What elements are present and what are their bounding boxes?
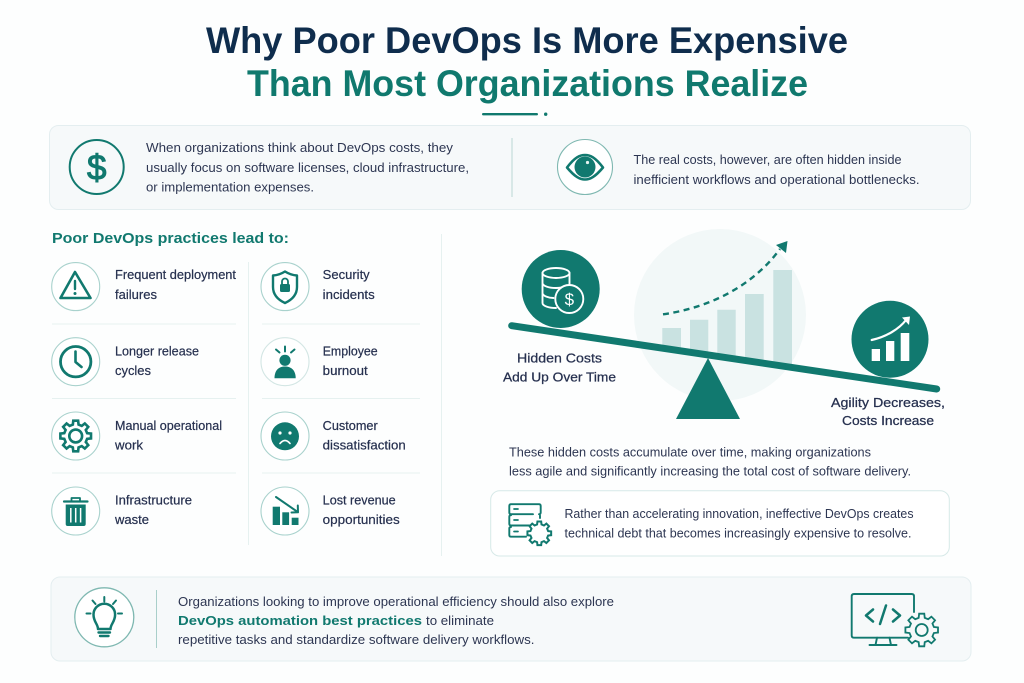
icon: clock (52, 338, 100, 386)
heading: poor practices: Poor DevOps practices lead to: (52, 230, 289, 247)
item: security incidents: Security (323, 268, 370, 282)
item: infrastructure waste: Infrastructure (115, 493, 192, 507)
item: employee burnout: Employee (323, 344, 378, 358)
intro text left (146, 141, 469, 194)
bar chart (662, 270, 792, 368)
icon: monitor with code and gear (852, 594, 938, 646)
text block: accumulation: These hidden costs accumulate over time, making organizations (509, 446, 871, 460)
icon: declining bars (261, 487, 309, 535)
chart backdrop circle (634, 229, 806, 401)
item: manual operational work: work (114, 439, 144, 453)
recommendation text: repetitive tasks and standardize software delivery workflows. (178, 633, 534, 647)
label: hidden costs: Add Up Over Time (503, 370, 616, 385)
icon: sad face (261, 412, 309, 460)
icon: shield (261, 263, 309, 311)
icon: light bulb (75, 588, 134, 647)
item: employee burnout: burnout (323, 364, 368, 378)
fulcrum (676, 358, 740, 419)
item: manual operational work (52, 412, 222, 460)
chart: balance scale with rising costs (503, 229, 945, 428)
item: customer dissatisfaction (261, 412, 406, 460)
label: agility decreases (831, 395, 945, 428)
item: lost revenue opportunities: Lost revenue (323, 493, 396, 507)
intro text right (634, 153, 920, 187)
recommendation text: Organizations looking to improve operational efficiency should also explore (178, 595, 614, 609)
intro text left: When organizations think about DevOps costs, they (146, 141, 454, 155)
icon: trash (52, 487, 100, 535)
title (206, 20, 848, 104)
label: hidden costs: Hidden Costs (517, 351, 603, 366)
text block: accumulation: less agile and significantly increasing the total cost of software delivery. (509, 465, 911, 479)
text block: accumulation (509, 446, 911, 479)
item: frequent deployment failures (52, 263, 237, 311)
panel: automation recommendation (51, 577, 971, 661)
item: frequent deployment failures: failures (115, 288, 157, 302)
label: hidden costs (503, 351, 616, 385)
icon: dollar (70, 140, 124, 194)
icon: coins circle (522, 250, 600, 328)
item: longer release cycles (52, 338, 199, 386)
item: lost revenue opportunities: opportunities (323, 513, 400, 527)
title underline (482, 112, 547, 116)
item: customer dissatisfaction: Customer (323, 419, 378, 433)
icon: coins circle: $ (565, 290, 575, 309)
item: infrastructure waste (52, 487, 192, 535)
arrow: rising trend (663, 241, 788, 314)
recommendation text: to eliminate (426, 614, 494, 628)
callout: technical debt: Rather than accelerating innovation, ineffective DevOps creates (564, 507, 914, 521)
icon: eye (558, 140, 612, 194)
item: longer release cycles: cycles (115, 364, 151, 378)
intro text left: usually focus on software licenses, cloud infrastructure, (146, 161, 469, 175)
callout: technical debt: technical debt that becomes increasingly expensive to resolve. (564, 527, 912, 541)
panel: intro (50, 126, 970, 210)
item: manual operational work: Manual operational (115, 419, 222, 433)
icon: warning (52, 263, 100, 311)
item: lost revenue opportunities (261, 487, 400, 535)
item: security incidents (261, 263, 375, 311)
icon: server with gear (509, 504, 551, 545)
intro text right: inefficient workflows and operational bottlenecks. (634, 173, 920, 187)
icon: growth circle (852, 301, 928, 378)
item: employee burnout (261, 338, 378, 386)
title: Why Poor DevOps Is More Expensive (206, 20, 848, 61)
item: security incidents: incidents (323, 288, 375, 302)
label: agility decreases: Costs Increase (842, 413, 934, 428)
item: frequent deployment failures: Frequent deployment (115, 268, 237, 282)
item: infrastructure waste: waste (114, 513, 149, 527)
label: agility decreases: Agility Decreases, (831, 395, 945, 410)
intro text left: or implementation expenses. (146, 180, 314, 194)
beam (512, 326, 937, 389)
item: customer dissatisfaction: dissatisfaction (323, 439, 406, 453)
icon: gear (52, 412, 100, 460)
icon: burnout person (261, 338, 309, 386)
item: longer release cycles: Longer release (115, 344, 199, 358)
recommendation text: DevOps automation best practices (178, 613, 422, 628)
recommendation text (178, 595, 614, 647)
callout: technical debt (491, 491, 949, 556)
intro text right: The real costs, however, are often hidden inside (634, 153, 902, 167)
icon: dollar: $ (87, 148, 106, 188)
title: Than Most Organizations Realize (247, 63, 808, 104)
